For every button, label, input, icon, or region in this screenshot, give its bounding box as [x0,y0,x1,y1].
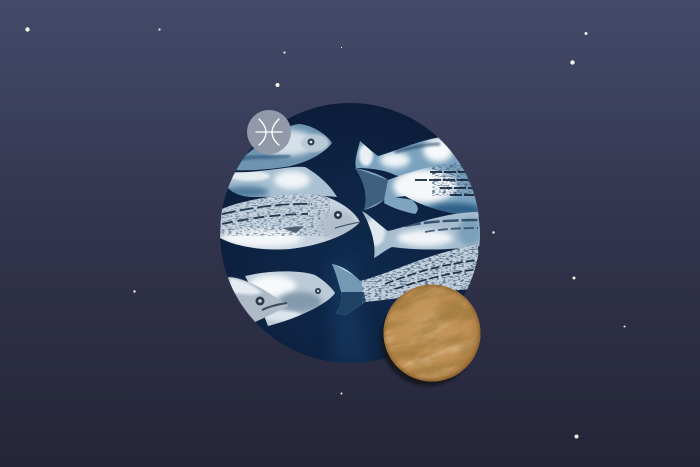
photo disc: school of fish [215,98,485,368]
fish: right top [355,136,482,200]
fish: right lower [330,244,482,316]
stars [25,27,626,439]
fish: lower left rear [245,271,335,326]
icon: Pisces badge [247,110,291,154]
fish: right second [355,160,483,217]
fish: right third [362,211,482,258]
fish: second left [221,167,337,198]
fish: top left [232,124,332,170]
planet: Venus with shadow [380,284,480,388]
fish: lower left front [228,277,288,328]
fish: center left [218,194,360,249]
fish: below-belly blob [384,197,418,214]
